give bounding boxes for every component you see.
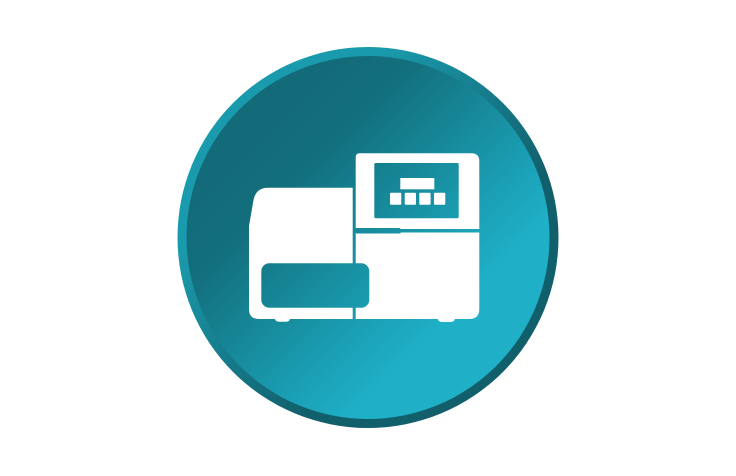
display panel [374,163,459,218]
control buttons [390,193,445,205]
right module lower housing [356,232,479,319]
display readout [400,178,434,189]
right module upper housing [356,153,479,229]
right foot [438,318,455,322]
outer ring [178,47,558,428]
inner circle face [186,56,550,419]
left foot [275,318,290,322]
instrument [249,153,479,322]
front drawer panel [261,263,369,308]
left module body [249,188,353,319]
slot between housings [356,228,479,234]
